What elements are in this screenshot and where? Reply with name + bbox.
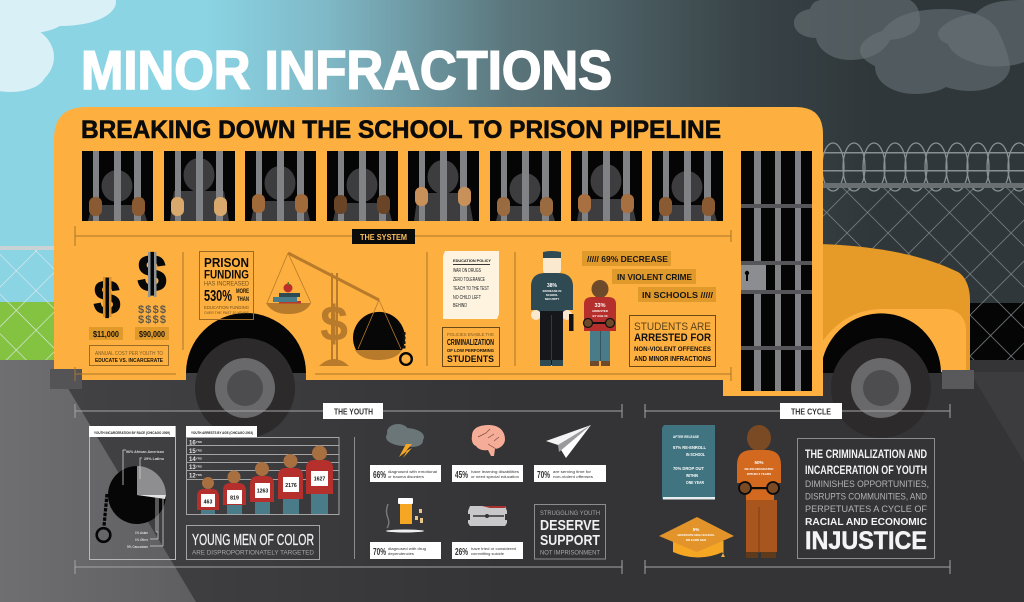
stat: 70 percent drug: 70% [373, 547, 386, 558]
icon: large dollar with bars: $ [138, 245, 167, 303]
stat: 45 percent: 45% [455, 470, 468, 481]
icon: scale of justice: $ [320, 296, 348, 352]
rear wheel [186, 313, 306, 438]
panel: prison funding: 530% [204, 288, 232, 305]
panel: arrests by age lineup [186, 426, 339, 514]
stat: 26 percent: have tried or considered [471, 547, 516, 551]
rear bumper [50, 369, 82, 389]
banners: decrease in violent crime: ///// 69% DECREASE [587, 254, 668, 264]
callout: criminalization and incarceration of youth: THE CRIMINALIZATION AND [805, 447, 927, 461]
caption: ANNUAL COST PER YOUTH TO [95, 351, 163, 357]
section line: the cycle [645, 403, 950, 574]
panel: incarceration by race pie chart: 29% Latino [144, 457, 165, 461]
figure: school security officer: SECURITY [545, 297, 559, 301]
figure: prisoner in orange: WITHIN 3 YEARS [747, 472, 771, 476]
stat: 26 percent: 26% [455, 547, 468, 558]
callout: deserve support: DESERVE [540, 517, 600, 534]
figure: age 14: 1263 [257, 488, 268, 494]
icon: small dollar rows: $$$$ [138, 304, 166, 316]
panel: prison funding: THAN [237, 296, 249, 303]
panel: arrests by age lineup: 15 [189, 449, 196, 455]
icon: book after release: ONE YEAR [686, 480, 704, 486]
ground [0, 360, 1024, 602]
window 3 [245, 151, 316, 221]
background sky [0, 0, 1024, 365]
cost: 90000: $90,000 [139, 330, 165, 339]
panel: arrests by age lineup: 13 [189, 465, 196, 471]
stat: 26 percent [452, 542, 523, 559]
section line: the youth [75, 403, 622, 574]
callout: young men of color [186, 526, 320, 560]
hood [820, 244, 970, 372]
title: MINOR INFRACTIONS [81, 39, 612, 101]
panel: arrests by age lineup: 14 [189, 457, 196, 463]
icon: graduation cap [659, 517, 734, 558]
icon: paper plane [546, 425, 591, 458]
figure: school security officer: INCREASE IN [543, 289, 561, 293]
callout: young men of color: ARE DISPROPORTIONATELY TARGETED [192, 550, 314, 556]
window 6 [490, 151, 561, 221]
scale pan with books and apple [266, 282, 311, 314]
window 7 [571, 151, 642, 221]
figure: school security officer: 38% [547, 283, 558, 289]
section line: the system: THE SYSTEM [360, 232, 407, 242]
wrecking ball and handcuff [353, 300, 412, 365]
figure: arrested student: ARRESTED [592, 309, 608, 313]
paper [443, 251, 499, 319]
stat: 45 percent: have learning disabilities [471, 470, 519, 474]
panel: arrests by age lineup: YRS [196, 473, 202, 477]
caption: criminalization: STUDENTS [447, 354, 494, 365]
bus [50, 107, 974, 438]
panel: incarceration by race pie chart [89, 426, 176, 560]
front wheel [823, 313, 941, 438]
stat: 70 percent non-violent [534, 465, 606, 482]
window 2 [164, 151, 235, 221]
stat: 70 percent non-violent: are serving time for [553, 470, 592, 474]
subtitle: BREAKING DOWN THE SCHOOL TO PRISON PIPELINE [81, 116, 721, 144]
callout: students arrested: ARRESTED FOR [634, 332, 711, 344]
caption: criminalization: POLICIES ENABLE THE [447, 332, 494, 337]
icon: pill bottle [386, 498, 424, 532]
callout: criminalization and incarceration of youth: INJUSTICE [805, 527, 927, 555]
banners: decrease in violent crime [582, 251, 716, 302]
stat: 70 percent drug [370, 542, 441, 559]
callout: students arrested: STUDENTS ARE [634, 321, 711, 333]
callout: students arrested: NON-VIOLENT OFFENCES [634, 346, 712, 353]
panel: education policy: EDUCATION POLICY [453, 259, 491, 263]
jail door [741, 151, 812, 391]
icon: graduation cap: GRADUATE HIGH SCHOOL [677, 533, 715, 537]
icon: chain and cuff [97, 494, 110, 542]
caption: EDUCATE VS. INCARCERATE [95, 358, 163, 364]
clouds: dark storm [794, 0, 1024, 94]
windows with prisoners [82, 151, 723, 221]
stat: 45 percent: or need special education [471, 475, 519, 479]
banners: decrease in violent crime: IN VIOLENT CRIME [617, 272, 692, 282]
panel: incarceration by race pie chart: 5% Caucasian [127, 545, 148, 549]
panel: education policy: WAR ON DRUGS [453, 268, 481, 274]
panel: arrests by age lineup: YRS [196, 464, 202, 468]
caption: criminalization: CRIMINALIZATION [447, 338, 494, 347]
panel: education policy: BEHIND [453, 303, 467, 309]
callout: deserve support: NOT IMPRISONMENT [540, 550, 600, 556]
window 1 [82, 151, 153, 221]
panel: incarceration by race pie chart: 1% Other [135, 538, 148, 542]
section line: the cycle: THE CYCLE [791, 408, 832, 416]
callout: deserve support [534, 504, 606, 559]
panel: education policy: NO CHILD LEFT [453, 295, 481, 301]
stat: 70 percent non-violent: non-violent offenses [553, 475, 593, 479]
stat: 66 percent [370, 465, 441, 482]
stat: 70 percent drug: dependencies [388, 552, 414, 556]
callout: criminalization and incarceration of youth: DIMINISHES OPPORTUNITIES, [805, 479, 929, 489]
left fence [0, 246, 56, 360]
clouds: white [0, 0, 116, 92]
panel: arrests by age lineup: YRS [196, 456, 202, 460]
cost: 11000: $11,000 [93, 330, 119, 339]
icon: scale of justice [266, 253, 412, 366]
stat: 70 percent drug: diagnosed with drug [388, 547, 426, 551]
callout: students arrested: AND MINOR INFRACTIONS [634, 354, 711, 363]
figure: school security officer: SCHOOL [546, 293, 558, 297]
panel: incarceration by race pie chart: 1% Asian [135, 531, 148, 535]
callout: students arrested [630, 316, 716, 366]
right fence with razor wire [822, 143, 1024, 361]
banners: decrease in violent crime: IN SCHOOLS ///// [642, 290, 714, 300]
panel: prison funding: FUNDING [204, 268, 249, 282]
callout: criminalization and incarceration of youth: PERPETUATES A CYCLE OF [805, 504, 928, 514]
stat: 66 percent: 66% [373, 470, 386, 481]
icon: graduation cap: 5% [693, 527, 699, 532]
figure: age 13: 819 [230, 496, 239, 502]
callout: deserve support: SUPPORT [540, 532, 600, 549]
callout: young men of color: YOUNG MEN OF COLOR [192, 532, 314, 549]
panel: prison funding: PRISON [204, 255, 249, 270]
caption [90, 346, 168, 366]
section line: the youth: THE YOUTH [334, 408, 373, 416]
caption: criminalization [442, 328, 500, 366]
figure: arrested student: 33% [594, 303, 606, 309]
caption: criminalization: OF LOW PERFORMING [447, 348, 494, 354]
icon: brain [472, 425, 505, 456]
stat: 26 percent: committing suicide [471, 552, 504, 556]
figure: age 15 [278, 454, 303, 514]
figure: prisoner in orange: RE-INCARCERATED [745, 467, 774, 471]
stat: 45 percent [452, 465, 523, 482]
panel: prison funding: HAS INCREASED [204, 282, 250, 288]
figure: age 12 [197, 477, 219, 514]
stat: 70 percent non-violent: 70% [537, 470, 550, 481]
icon: book after release: WITHIN [686, 473, 698, 479]
icon: book after release [662, 425, 715, 500]
panel: cost per youth: $$$$ [138, 314, 166, 326]
figure: school security officer [531, 251, 574, 366]
icon: book after release: 57% RE-ENROLL [673, 445, 706, 451]
figure: prisoner in orange [737, 425, 781, 558]
panel: prison funding [200, 252, 254, 320]
icon: small dollar: $ [94, 272, 121, 325]
figure: age 15: 2176 [285, 483, 297, 489]
figure: age 16: 1627 [314, 476, 325, 482]
panel: education policy [443, 251, 499, 319]
window 5 [408, 151, 479, 221]
figure: age 16 [306, 446, 333, 514]
icon: book after release: IN SCHOOL [686, 452, 705, 458]
icon: book after release: AFTER RELEASE [673, 434, 699, 439]
grass [0, 302, 60, 360]
panel: prison funding: OVER THE PAST 20 YEARS [204, 311, 250, 315]
stat: 66 percent: or trauma disorders [388, 475, 424, 479]
callout: criminalization and incarceration of youth: DISRUPTS COMMUNITIES, AND [805, 492, 927, 502]
icon: storm cloud [386, 424, 424, 458]
icon: graduation cap: OR EARN GED [686, 538, 706, 542]
callout: criminalization and incarceration of youth [798, 438, 934, 558]
panel: arrests by age lineup: YRS [196, 440, 202, 444]
figure: arrested student [584, 280, 616, 366]
figure: arrested student: BY AGE 23 [593, 314, 608, 318]
panel: prison funding: EDUCATION FUNDING [204, 305, 249, 310]
panel: cost per youth [89, 245, 169, 366]
window 8 [652, 151, 723, 221]
divider [354, 437, 356, 559]
panel: arrests by age lineup: YOUTH ARRESTS BY AGE (CHICAGO 2003) [191, 431, 254, 435]
figure: age 14 [250, 462, 274, 514]
panel: arrests by age lineup: YRS [196, 448, 202, 452]
callout: deserve support: STRUGGLING YOUTH [540, 511, 600, 517]
stat: 66 percent: diagnosed with emotional [388, 470, 437, 474]
fender [820, 309, 966, 372]
figure: age 13 [223, 470, 246, 514]
figure: age 12: 463 [204, 500, 212, 506]
bus body [54, 107, 823, 396]
panel: arrests by age lineup: 12 [189, 474, 196, 480]
panel: prison funding: MORE [236, 288, 249, 295]
door frame repaint [723, 340, 823, 396]
callout: criminalization and incarceration of youth: INCARCERATION OF YOUTH [805, 463, 927, 477]
window 4 [327, 151, 398, 221]
icon: razor blade [468, 506, 507, 526]
callout: criminalization and incarceration of youth: RACIAL AND ECONOMIC [805, 517, 927, 528]
panel: education policy: TEACH TO THE TEST [453, 286, 489, 292]
front bumper [942, 370, 974, 389]
panel: arrests by age lineup: 16 [189, 440, 196, 446]
figure: prisoner in orange: 50% [754, 460, 764, 465]
panel: education policy: ZERO TOLERANCE [453, 277, 485, 283]
section line: the system [75, 226, 731, 381]
pie chart [108, 450, 166, 546]
icon: book after release: 70% DROP OUT [673, 466, 704, 472]
panel: incarceration by race pie chart: 96% African American [126, 450, 164, 454]
panel: incarceration by race pie chart: YOUTH INCARCERATION BY RACE (CHICAGO 2009) [94, 431, 171, 435]
